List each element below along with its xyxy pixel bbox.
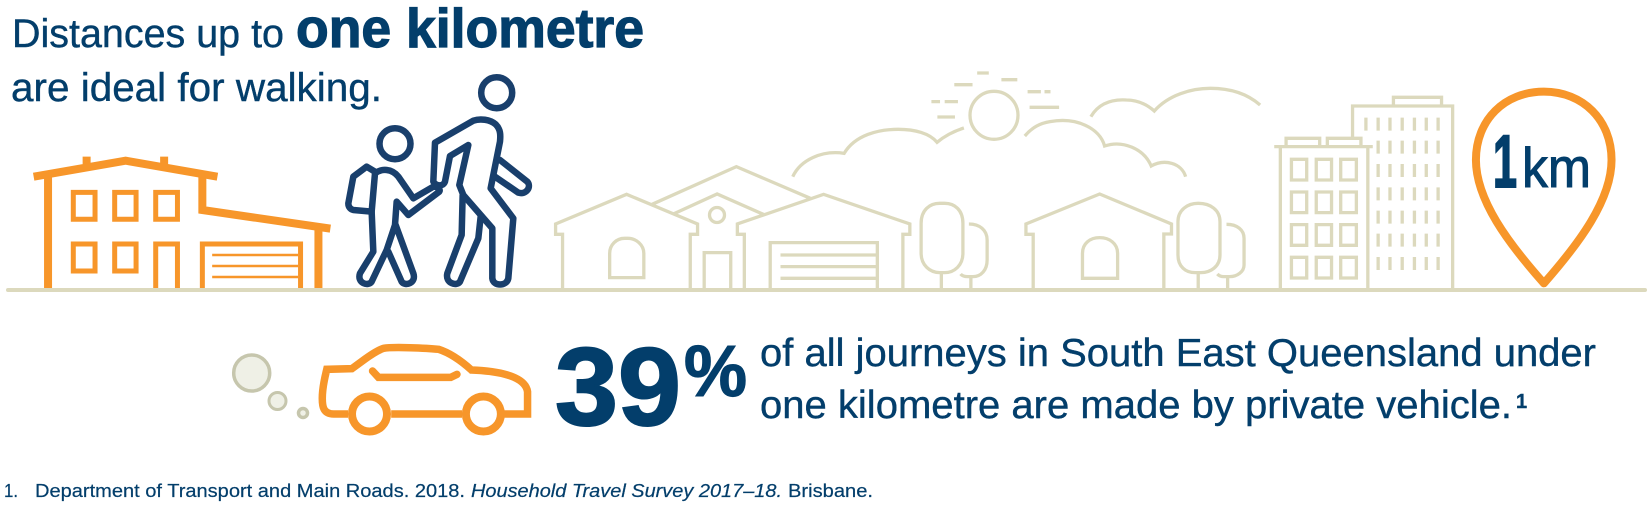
- attic window: [710, 208, 724, 222]
- door: [704, 253, 731, 288]
- statistic description: of all journeys in South East Queensland under: [760, 332, 1596, 375]
- cloud right: [1025, 120, 1186, 177]
- cloud: [793, 128, 964, 177]
- small tree: [1217, 224, 1244, 288]
- tower: [1353, 97, 1453, 288]
- house: [1026, 194, 1171, 288]
- ground line: [8, 288, 1645, 292]
- title: [11, 0, 644, 110]
- statistic: 39%: 39: [555, 326, 681, 449]
- footnote: [4, 481, 873, 501]
- walking figures: [348, 119, 529, 285]
- far side scene: [1025, 88, 1453, 288]
- statistic: 39%: [555, 326, 747, 449]
- sun rays: [931, 73, 1059, 117]
- footnote: Department of Transport and Main Roads. 2018.: [35, 481, 465, 501]
- sun: [970, 91, 1018, 139]
- tree: [921, 203, 963, 288]
- pin label: 1km: km: [1522, 136, 1591, 199]
- icon: adult and child walking: [348, 77, 529, 285]
- small tree: [961, 224, 987, 288]
- thought bubbles: [234, 355, 308, 418]
- footnote: Household Travel Survey 2017–18.: [471, 481, 782, 501]
- title: Distances up to: [12, 12, 284, 56]
- icon: location pin: [1476, 92, 1612, 283]
- tower windows: [1366, 118, 1438, 270]
- pin label: 1km: 1: [1493, 120, 1517, 203]
- footnote: 1.: [4, 481, 18, 501]
- footnote: Brisbane.: [788, 481, 873, 501]
- pin label: 1km: [1493, 120, 1591, 203]
- statistic description: one kilometre are made by private vehicle.: [760, 384, 1512, 427]
- statistic: 39%: %: [684, 332, 747, 412]
- suburban houses and sky: [556, 73, 1059, 288]
- adult head: [481, 77, 512, 108]
- statistic description: [760, 332, 1596, 427]
- car body: [322, 348, 528, 414]
- house left: [556, 194, 698, 288]
- statistic description: 1: [1516, 391, 1527, 413]
- title: are ideal for walking.: [11, 66, 382, 110]
- tree: [1178, 203, 1220, 288]
- arched window: [610, 238, 644, 278]
- garage: [770, 243, 877, 288]
- child head: [380, 128, 410, 159]
- back roofs: [652, 167, 810, 215]
- cloud top: [1091, 88, 1260, 117]
- apartment block: [1274, 138, 1373, 288]
- apartment windows: [1291, 159, 1356, 278]
- house right: [737, 194, 910, 288]
- icon: car: [322, 348, 528, 432]
- wheels: [352, 396, 387, 432]
- icon: orange house: [34, 157, 330, 288]
- arched window: [1082, 238, 1118, 278]
